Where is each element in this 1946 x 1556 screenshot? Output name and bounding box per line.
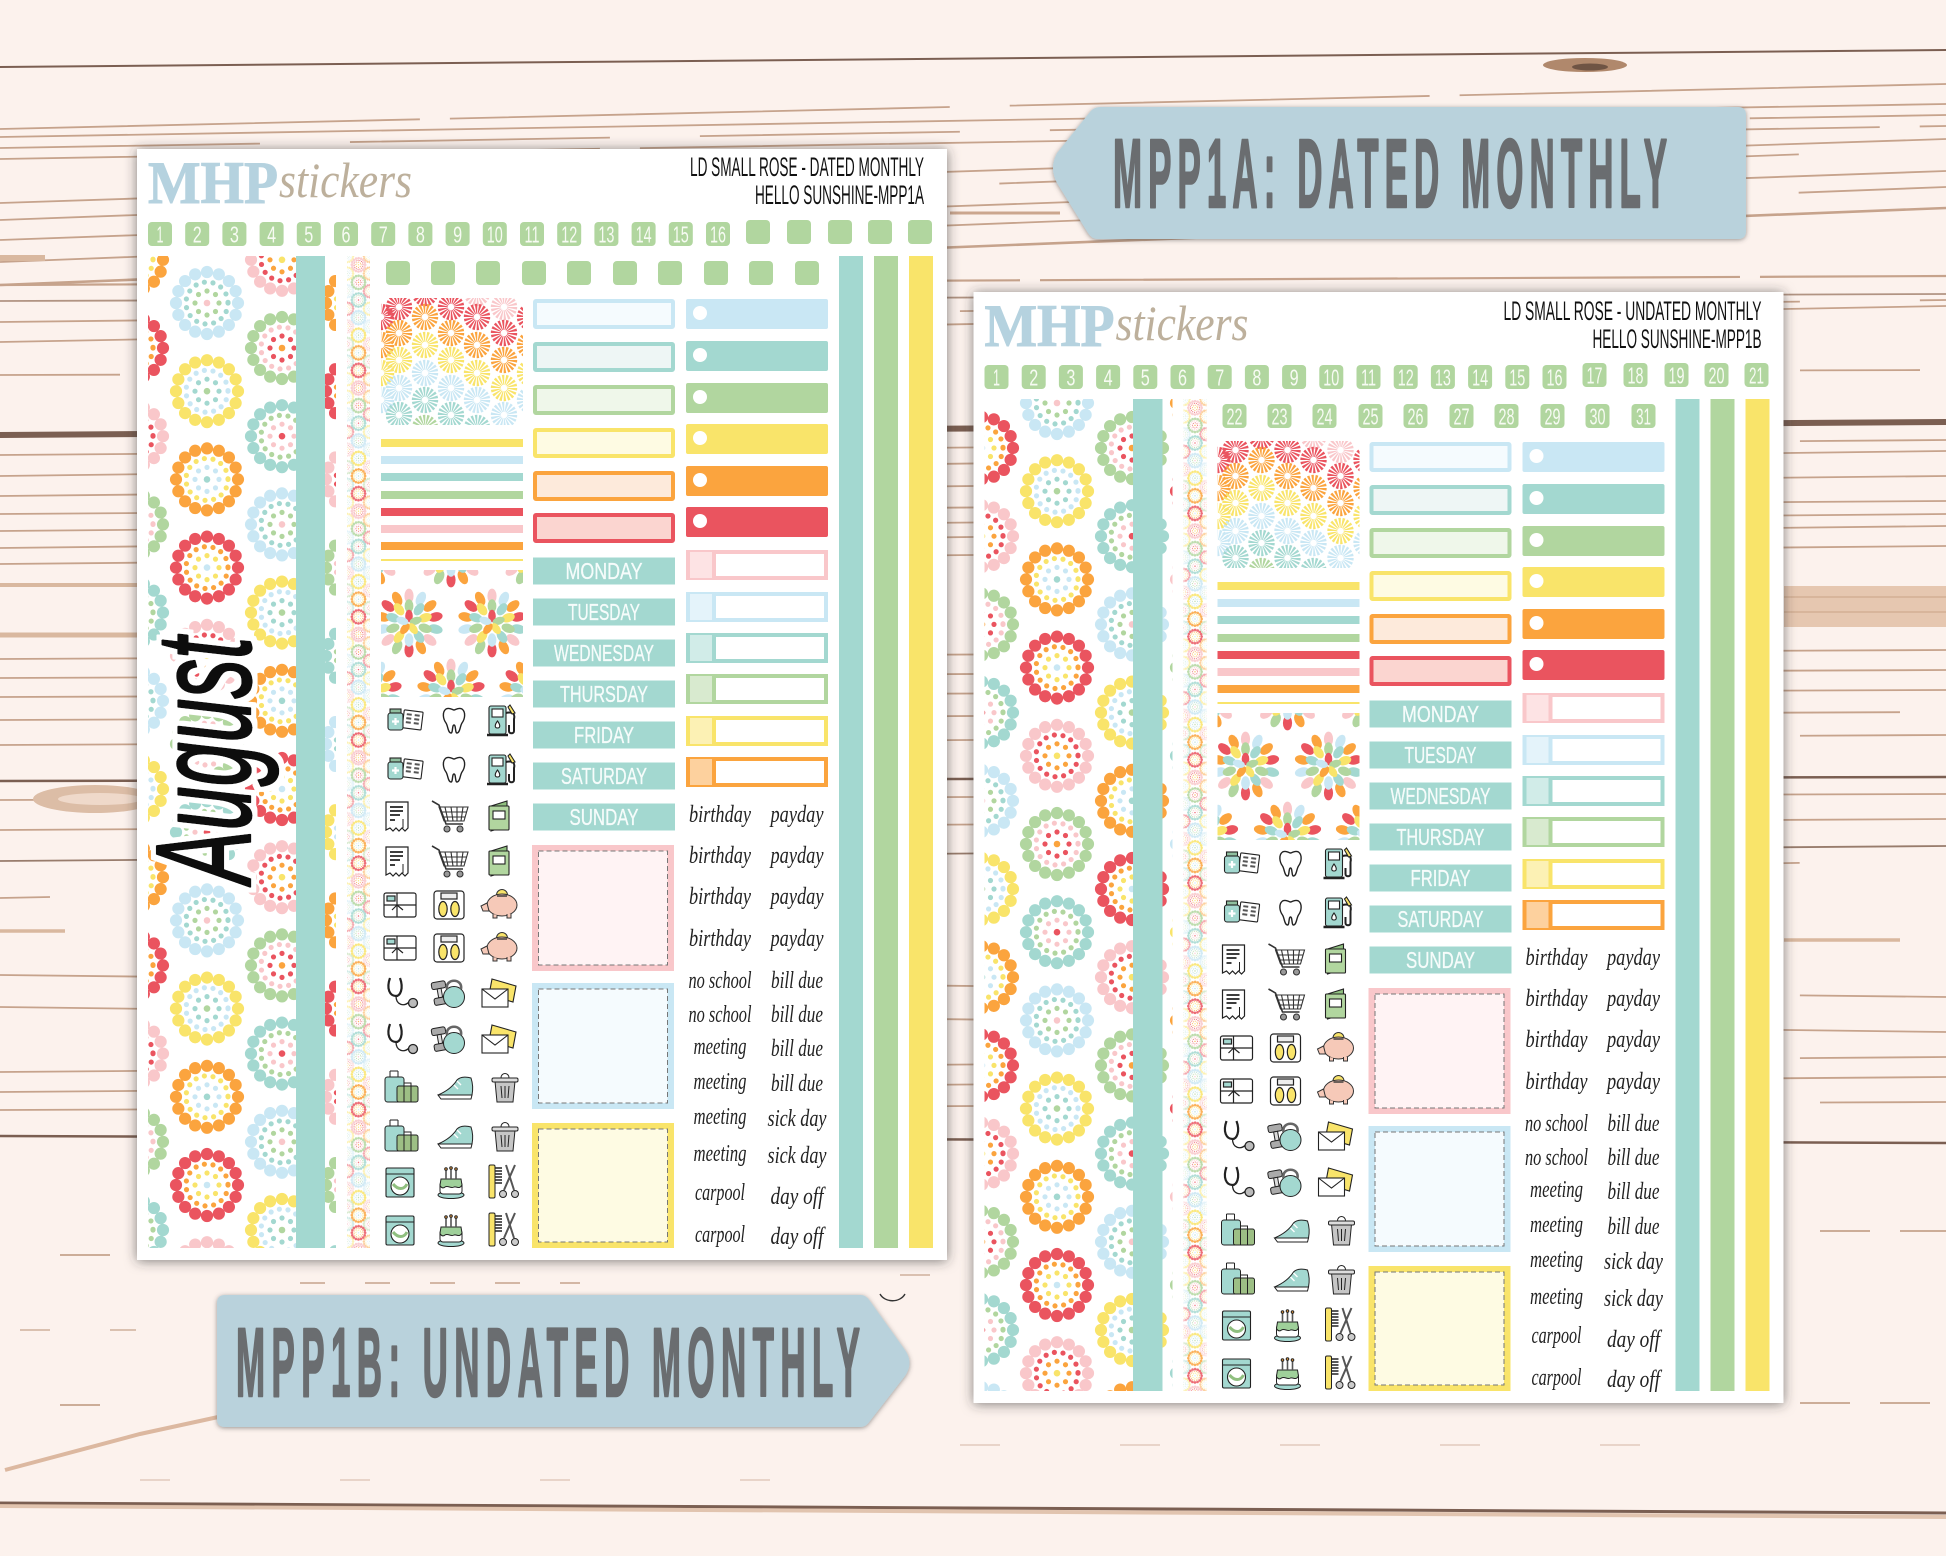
colour stripes [381,439,523,561]
date squares rows: 25 [1362,404,1378,430]
icon stickers [1220,848,1355,1390]
sheet title: HELLO SUNSHINE-MPP1A [755,180,924,210]
script word stickers: birthday [689,843,751,869]
dot tab labels [686,299,828,537]
weekday labels: WEDNESDAY [554,640,654,666]
script word stickers: day off [1607,1367,1663,1393]
script word stickers: no school [1525,1145,1588,1171]
dashed note boxes [1368,988,1510,1391]
date squares rows [984,362,1768,430]
dot tab labels [1522,442,1664,680]
petal burst pattern square [1170,662,1404,870]
script word stickers: carpool [695,1222,745,1248]
script word stickers: payday [1605,945,1660,971]
script word stickers: meeting [694,1069,746,1095]
script word stickers: sick day [768,1143,827,1169]
date squares rows: 24 [1316,404,1333,430]
script word stickers: day off [770,1224,826,1250]
date squares row: 8 [416,222,425,248]
date squares row: 11 [524,222,540,248]
date squares rows: 20 [1708,362,1724,388]
daisy pattern square [1209,428,1375,579]
script word stickers: no school [688,968,752,994]
script word stickers: carpool [1532,1323,1582,1349]
panel: sticker sheet MPP1B [964,284,1793,1414]
date squares row: 7 [379,222,388,248]
script word stickers: bill due [771,1036,823,1062]
script word stickers: bill due [1608,1179,1660,1205]
date squares rows: 6 [1178,364,1187,390]
script word stickers: sick day [1604,1286,1663,1312]
script word stickers [688,802,827,1250]
flower pattern strip [101,141,388,1392]
script word stickers: meeting [694,1034,746,1060]
washi flower strip [1184,399,1206,1391]
August month script: August [128,634,279,887]
script word stickers: bill due [771,1071,823,1097]
outlined label boxes [1372,444,1510,684]
date squares rows: 17 [1586,362,1602,388]
weekday labels [533,558,675,830]
petal burst pattern square [333,519,568,727]
script word stickers: bill due [1608,1111,1660,1137]
weekday labels: TUESDAY [1404,742,1476,768]
script word stickers: birthday [689,926,751,952]
script word stickers: meeting [1530,1177,1583,1203]
script word stickers: sick day [1604,1249,1663,1275]
date squares rows: 28 [1498,404,1514,430]
date squares row: 14 [636,222,652,248]
date squares rows: 5 [1141,364,1150,390]
script word stickers: meeting [1530,1247,1583,1273]
script word stickers: birthday [1526,986,1588,1012]
sheet title [690,152,924,210]
script word stickers [1525,945,1663,1393]
script word stickers: birthday [1526,945,1588,971]
date squares rows: 23 [1272,404,1288,430]
script word stickers: payday [1605,1027,1660,1053]
script word stickers: no school [688,1002,752,1028]
script word stickers: bill due [1608,1145,1660,1171]
date squares rows: 12 [1398,364,1414,390]
date squares row [148,220,932,285]
script word stickers: bill due [771,968,823,994]
script word stickers: payday [769,926,824,952]
date squares row: 15 [673,222,689,248]
script word stickers: bill due [771,1002,823,1028]
vertical colour bars [839,256,933,1248]
script word stickers: birthday [689,802,751,828]
vertical colour bars [1676,399,1770,1391]
script word stickers: carpool [1532,1365,1582,1391]
teal vertical bar [1133,399,1162,1391]
date squares rows: 31 [1636,404,1651,430]
date squares rows: 10 [1323,364,1339,390]
date squares row: 13 [598,222,614,248]
label: MPP1A dated monthly: MPP1A: DATED MONTHLY [1113,121,1667,228]
sheet title: LD SMALL ROSE - DATED MONTHLY [690,152,924,182]
date squares rows: 7 [1215,364,1224,390]
date squares row: 1 [156,222,164,248]
weekday labels: WEDNESDAY [1390,783,1490,809]
date squares rows: 4 [1104,364,1113,390]
date squares rows: 19 [1668,362,1684,388]
weekday labels: THURSDAY [1396,824,1484,850]
script word stickers: birthday [1526,1069,1588,1095]
date squares rows: 15 [1509,364,1525,390]
date squares rows: 22 [1226,404,1242,430]
date squares row: 4 [267,222,276,248]
weekday labels: TUESDAY [568,599,640,625]
weekday labels: SATURDAY [1398,906,1484,932]
checkbox labels [1524,695,1662,928]
logo: MHP stickers: MHP [984,293,1114,359]
sheet title [1504,296,1762,354]
date squares rows: 1 [993,364,1000,390]
weekday labels: SUNDAY [570,804,638,830]
logo: MHP stickers [148,150,412,216]
logo: MHP stickers [984,293,1248,359]
date squares rows: 3 [1066,364,1075,390]
dashed note boxes [532,845,674,1248]
script word stickers: meeting [1530,1284,1583,1310]
date squares rows: 21 [1749,362,1764,388]
checkbox labels [688,552,826,785]
weekday labels [1370,700,1512,974]
date squares row: 9 [453,222,462,248]
script word stickers: meeting [1530,1212,1583,1238]
date squares rows: 13 [1435,364,1451,390]
date squares rows: 29 [1544,404,1560,430]
logo: MHP stickers: stickers [1116,295,1248,351]
date squares rows: 30 [1590,404,1606,430]
script word stickers: day off [770,1184,826,1210]
washi flower strip [347,256,370,1248]
logo: MHP stickers: MHP [148,150,278,216]
script word stickers: payday [769,802,824,828]
script word stickers: meeting [694,1104,746,1130]
panel: sticker sheet MPP1A [101,141,947,1392]
script word stickers: payday [1605,986,1660,1012]
date squares row: 6 [342,222,350,248]
date squares row: 2 [193,222,202,248]
script word stickers: no school [1525,1111,1588,1137]
daisy pattern square [373,285,538,436]
date squares rows: 2 [1029,364,1038,390]
weekday labels: MONDAY [566,558,642,584]
script word stickers: payday [769,843,824,869]
outlined label boxes [535,301,673,541]
date squares row: 16 [710,222,726,248]
date squares rows: 11 [1361,364,1376,390]
script word stickers: bill due [1608,1214,1660,1240]
script word stickers: payday [769,884,824,910]
weekday labels: FRIDAY [1410,865,1470,891]
script word stickers: carpool [695,1180,745,1206]
script word stickers: payday [1605,1069,1660,1095]
date squares rows: 14 [1472,364,1488,390]
date squares row: 3 [230,222,239,248]
weekday labels: THURSDAY [560,681,648,707]
logo: MHP stickers: stickers [279,152,412,208]
script word stickers: day off [1607,1327,1663,1353]
script word stickers: birthday [1526,1027,1588,1053]
date squares rows: 18 [1628,362,1644,388]
date squares row: 5 [304,222,313,248]
label: MPP1B undated monthly: MPP1B: UNDATED MONTHLY [236,1310,860,1417]
icon stickers [384,705,518,1246]
date squares row: 12 [561,222,577,248]
date squares rows: 26 [1408,404,1424,430]
weekday labels: MONDAY [1402,701,1479,727]
script word stickers: sick day [768,1106,827,1132]
weekday labels: FRIDAY [574,722,634,748]
weekday labels: SATURDAY [561,763,647,789]
date squares rows: 16 [1546,364,1562,390]
sheet title: HELLO SUNSHINE-MPP1B [1592,324,1762,354]
flower pattern strip [951,241,1238,1492]
script word stickers: meeting [694,1141,746,1167]
script word stickers: birthday [689,884,751,910]
weekday labels: SUNDAY [1406,947,1475,973]
date squares rows: 27 [1454,404,1470,430]
date squares row: 10 [487,222,503,248]
colour stripes [1218,582,1360,704]
date squares rows: 9 [1290,364,1299,390]
teal vertical bar [296,256,325,1248]
label: MPP1A dated monthly [1053,107,1746,239]
date squares rows: 8 [1252,364,1261,390]
